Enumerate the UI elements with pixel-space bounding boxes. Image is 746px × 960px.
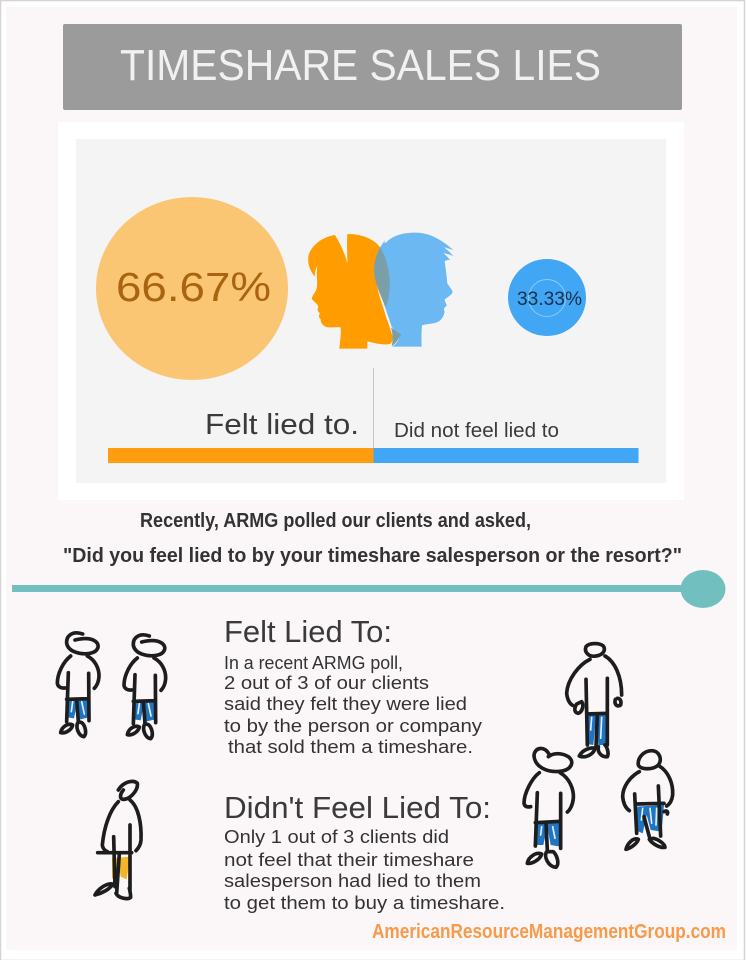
text block: felt lied to: In a recent ARMG poll, (224, 653, 403, 673)
poll question text: Recently, ARMG polled our clients and asked, (140, 510, 531, 532)
heading: didn't feel lied to: Didn't Feel Lied To: (224, 790, 491, 825)
icon: person 4 (top right) (567, 644, 622, 757)
text block: felt lied to: that sold them a timeshare. (228, 737, 473, 757)
icon: person 2 (felt lied to) (124, 635, 166, 739)
text block: felt lied to (224, 614, 482, 757)
timeline divider with dot (12, 570, 726, 608)
text block: did not feel lied to: not feel that their timeshare (224, 850, 474, 870)
circle: 33.33 percent (508, 259, 586, 336)
icon: person 6 (bottom right of group) (623, 751, 673, 849)
icon: person 1 (felt lied to) (57, 633, 99, 737)
text block: did not feel lied to (224, 790, 505, 913)
text block: felt lied to: said they felt they were lied (224, 694, 467, 714)
text block: did not feel lied to: to get them to buy a timeshare. (224, 893, 505, 913)
icon: girl and boy head silhouettes (308, 233, 453, 349)
poll question text: "Did you feel lied to by your timeshare salesperson or the resort?" (63, 545, 682, 567)
label: did not feel lied to: Did not feel lied to (394, 420, 559, 442)
icon: person 3 (did not feel lied to) (95, 781, 141, 899)
circle: 66.67 percent (96, 197, 288, 380)
title: TIMESHARE SALES LIES (120, 41, 601, 90)
icon: person 5 (bottom left of group) (524, 748, 573, 867)
circle: 33.33 percent: 33.33% (517, 289, 582, 310)
panel: poll results (58, 122, 684, 500)
poll question text (63, 510, 682, 567)
bar: blue share (374, 448, 638, 463)
label: felt lied to: Felt lied to. (205, 409, 359, 441)
text block: felt lied to: 2 out of 3 of our clients (224, 673, 429, 693)
text block: felt lied to: to by the person or company (224, 716, 482, 736)
bar: orange share (108, 448, 374, 463)
text block: did not feel lied to: Only 1 out of 3 clients did (224, 827, 449, 847)
title banner (63, 24, 682, 110)
circle: 66.67 percent: 66.67% (116, 264, 271, 310)
divider line (372, 368, 374, 448)
heading: felt lied to: Felt Lied To: (224, 614, 392, 649)
text block: did not feel lied to: salesperson had lied to them (224, 871, 481, 891)
